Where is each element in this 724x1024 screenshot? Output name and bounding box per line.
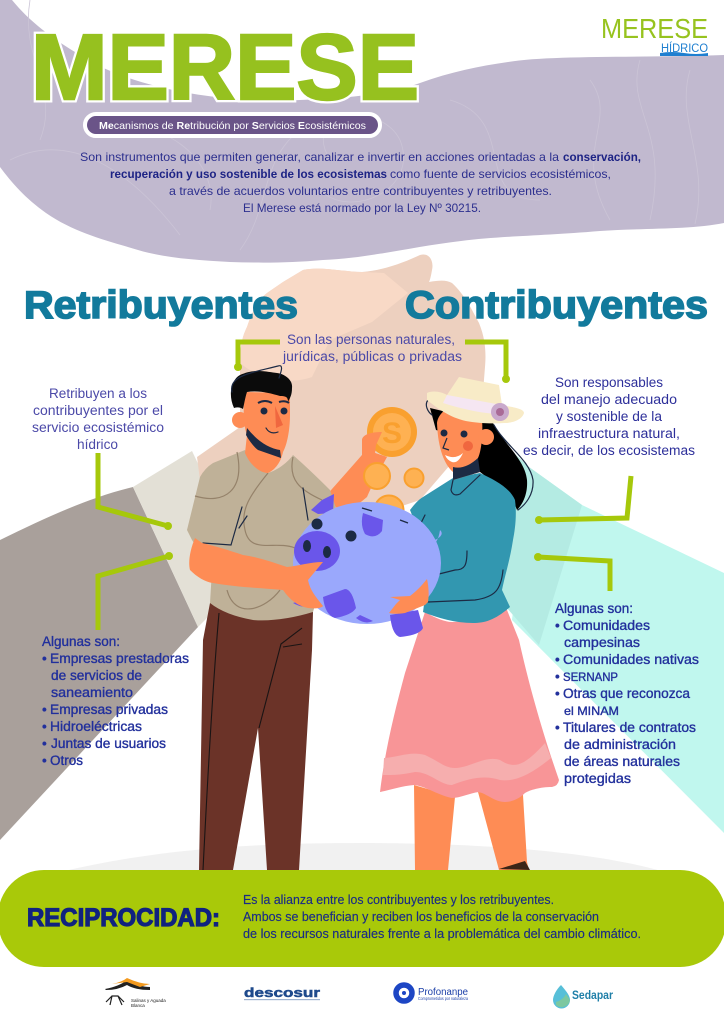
text block: reciprocidad: de los recursos naturales frente a la problemática del cambio climático. — [243, 927, 641, 941]
list: retribuyentes: Juntas de usuarios — [51, 736, 166, 751]
list: retribuyentes: Otros — [50, 753, 83, 768]
raised arm — [325, 455, 362, 515]
logo: Sedapar: Sedapar — [572, 988, 613, 1002]
list: contribuyentes: Comunidades — [563, 618, 650, 633]
neck and head — [244, 392, 290, 473]
text block: reciprocidad: Ambos se benefician y reciben los beneficios de la conservación — [243, 910, 599, 924]
logo: Merese Hidrico: HÍDRICO — [661, 42, 708, 55]
list: retribuyentes: • — [42, 651, 47, 666]
connector: shared definition right — [465, 342, 510, 383]
pants — [199, 603, 313, 870]
text block: definition: recuperación y uso sostenible de los ecosistemas — [110, 167, 387, 181]
arm: right teal sleeve — [500, 440, 724, 833]
list: retribuyentes: saneamiento — [51, 685, 133, 700]
connector: contribuyentes lower — [534, 553, 610, 591]
logo: Sernanp: Salinas y Aguada — [131, 998, 166, 1003]
character: woman — [380, 377, 559, 870]
text block: definition: a través de acuerdos voluntarios entre contribuyentes y retribuyentes. — [169, 184, 552, 198]
skirt — [380, 605, 559, 802]
shirt — [410, 473, 516, 623]
man's front hand — [189, 538, 323, 608]
logo: Sedapar — [553, 985, 613, 1008]
logo: Profonanpe: Profonanpe — [418, 987, 468, 998]
logo: Profonanpe: Comprometidos por naturaleza — [418, 996, 468, 1001]
list: retribuyentes: • — [42, 702, 47, 717]
illustration: coins — [362, 407, 424, 524]
ground shadow — [60, 843, 665, 872]
text block: retribuyentes definition: Retribuyen a los — [49, 386, 147, 401]
text block: reciprocidad — [243, 893, 641, 941]
list: contribuyentes: Comunidades nativas — [563, 652, 699, 667]
character: man — [187, 366, 387, 870]
list: retribuyentes — [42, 634, 189, 768]
arm: left taupe sleeve — [0, 451, 225, 840]
list: contribuyentes: el MINAM — [564, 704, 619, 718]
list: contribuyentes: • — [555, 686, 560, 701]
list: contribuyentes: • — [555, 618, 560, 633]
text block: retribuyentes definition — [32, 386, 164, 452]
text block: shared definition: Son las personas naturales, — [287, 332, 455, 347]
text block: definition — [80, 150, 641, 215]
list: contribuyentes: • — [555, 720, 560, 735]
list: contribuyentes: SERNANP — [563, 670, 618, 684]
connector: retribuyentes upper — [98, 453, 172, 530]
connector: contribuyentes upper — [535, 476, 631, 524]
text block: shared definition: jurídicas, públicas o privadas — [282, 349, 462, 364]
face — [437, 408, 482, 480]
list: contribuyentes: de administración — [564, 737, 676, 752]
text block: retribuyentes definition: contribuyentes por el — [33, 403, 163, 418]
logo: Profonanpe — [396, 985, 468, 1001]
subtitle pill: Mecanismos de Retribución por Servicios Ecosistémicos — [99, 120, 366, 132]
illustration: clasped hands — [197, 254, 485, 540]
connector: retribuyentes lower — [98, 552, 173, 630]
title: MERESE: MERESE — [31, 15, 419, 119]
logo: Merese Hidrico: MERESE — [601, 13, 708, 44]
heading: Contribuyentes: Contribuyentes — [405, 284, 708, 327]
list: retribuyentes: • — [42, 719, 47, 734]
list: retribuyentes: Empresas privadas — [50, 702, 168, 717]
logo: Sernanp: Blanca — [131, 1003, 145, 1008]
logo: descosur: descosur — [244, 985, 320, 1000]
panel: lavender header blob — [0, 0, 724, 263]
shirt — [187, 450, 340, 620]
list: contribuyentes: Otras que reconozca — [563, 686, 690, 701]
legs — [414, 785, 529, 870]
text block: contribuyentes definition: Son responsables — [555, 375, 663, 390]
list: retribuyentes: Hidroeléctricas — [50, 719, 142, 734]
list: retribuyentes: • — [42, 753, 47, 768]
list: retribuyentes: de servicios de — [51, 668, 142, 683]
list: contribuyentes — [555, 601, 699, 786]
title: MERESE: MERESE — [31, 15, 419, 119]
text block: definition: Son instrumentos que permiten generar, canalizar e invertir en acciones orientadas a la — [80, 150, 559, 164]
logo: Sernanp — [105, 978, 166, 1008]
list: contribuyentes: protegidas — [564, 771, 631, 786]
hair — [430, 408, 527, 510]
text block: definition: como fuente de servicios ecosistémicos, — [390, 167, 611, 181]
connector: shared definition left — [234, 342, 280, 371]
text block: retribuyentes definition: hídrico — [77, 437, 118, 452]
logo: Merese Hidrico — [601, 13, 708, 56]
text block: definition: El Merese está normado por la Ley Nº 30215. — [243, 201, 481, 215]
text block: retribuyentes definition: servicio ecosistémico — [32, 420, 164, 435]
subtitle pill — [85, 114, 380, 136]
list: contribuyentes: • — [555, 652, 560, 667]
list: contribuyentes: Algunas son: — [555, 601, 633, 616]
list: contribuyentes: • — [555, 669, 560, 684]
list: contribuyentes: Titulares de contratos — [563, 720, 696, 735]
heading: reciprocidad: RECIPROCIDAD: — [27, 904, 220, 932]
list: retribuyentes: • — [42, 736, 47, 751]
illustration: piggy bank — [293, 494, 442, 637]
heading: Retribuyentes: Retribuyentes — [24, 284, 298, 327]
list: retribuyentes: Empresas prestadoras — [50, 651, 189, 666]
text block: contribuyentes definition: es decir, de los ecosistemas — [523, 443, 695, 458]
panel: reciprocidad — [0, 870, 724, 967]
text block: reciprocidad: Es la alianza entre los contribuyentes y los retribuyentes. — [243, 893, 554, 907]
illustration: coins: S — [382, 417, 402, 450]
text block: contribuyentes definition: del manejo adecuado — [541, 392, 677, 407]
text block: definition: conservación, — [563, 150, 641, 164]
text block: contribuyentes definition — [523, 375, 695, 458]
list: retribuyentes: Algunas son: — [42, 634, 120, 649]
text block: shared definition — [282, 332, 462, 364]
text block: contribuyentes definition: infraestructura natural, — [538, 426, 680, 441]
hat — [427, 377, 524, 423]
list: contribuyentes: campesinas — [564, 635, 640, 650]
woman's hand — [389, 579, 429, 614]
text block: contribuyentes definition: y sostenible de la — [556, 409, 662, 424]
list: contribuyentes: de áreas naturales — [564, 754, 680, 769]
